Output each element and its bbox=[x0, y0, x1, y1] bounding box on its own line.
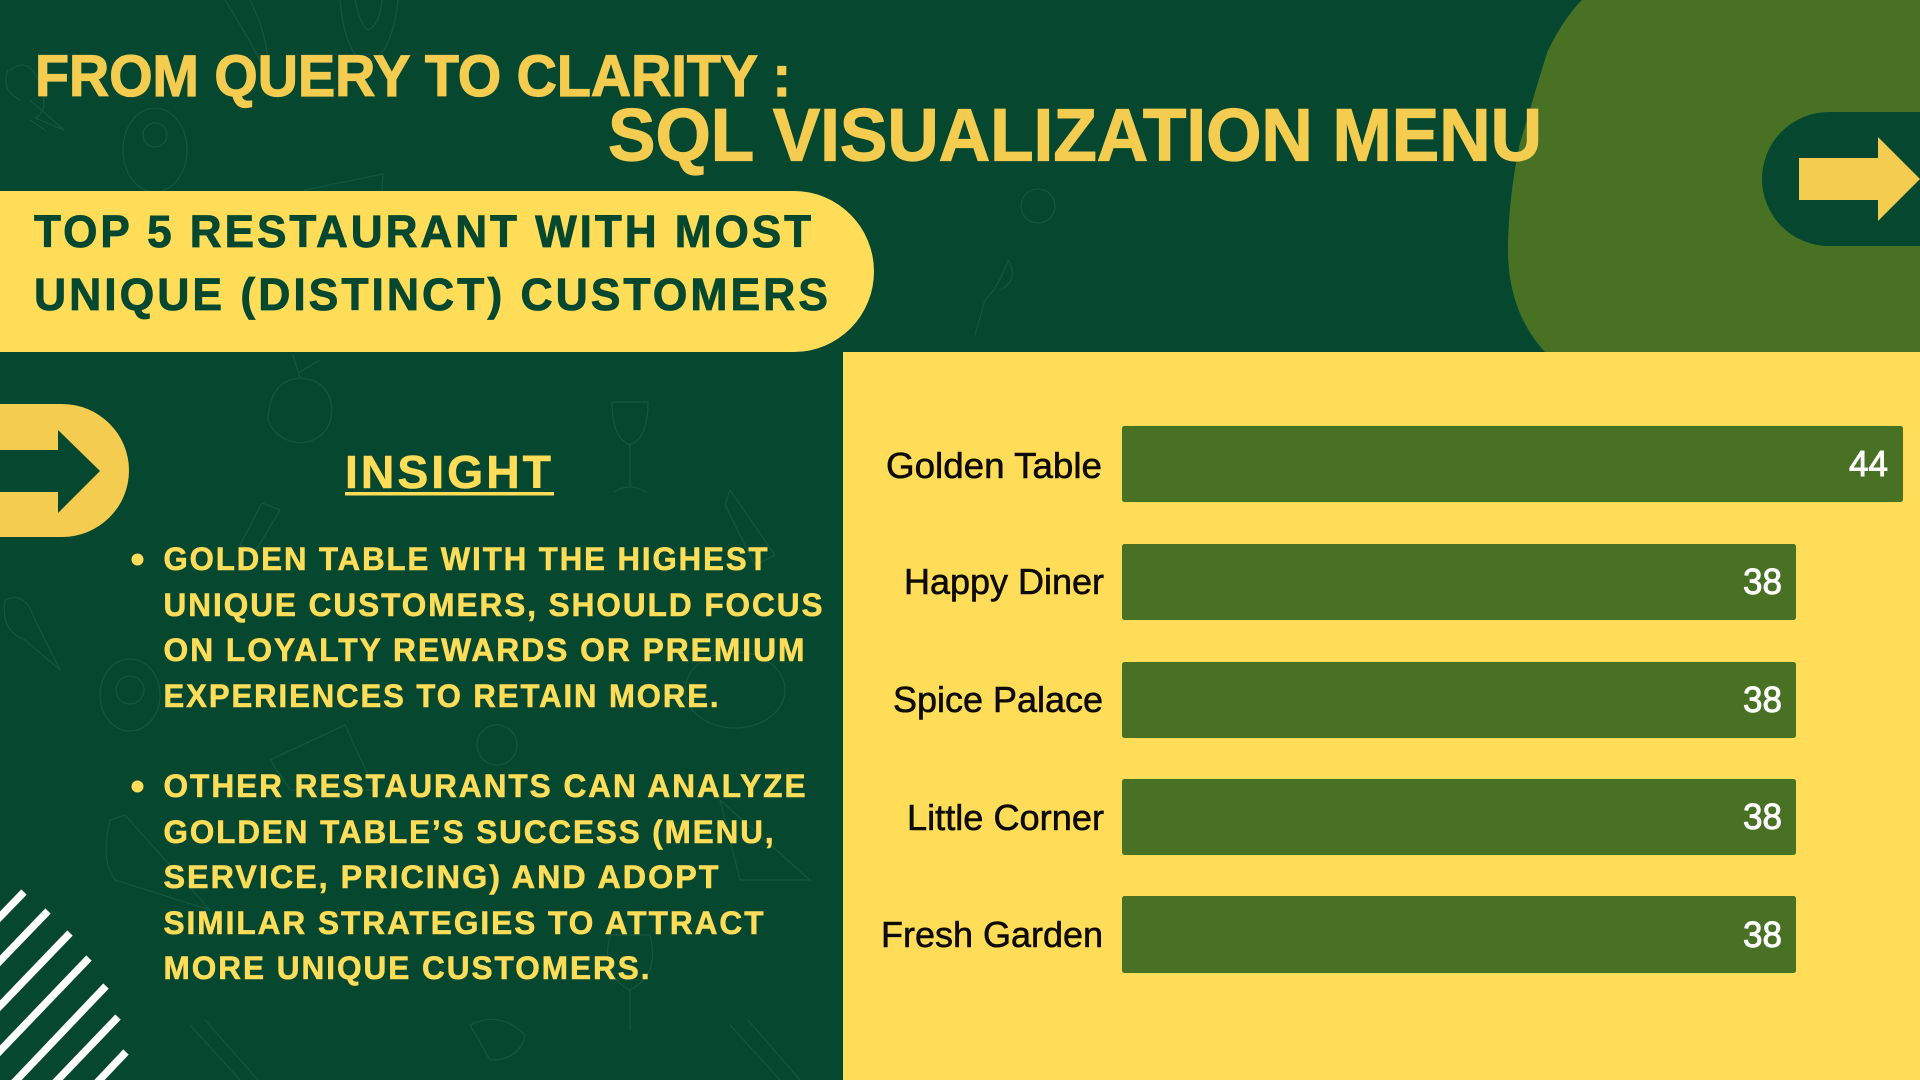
panel: bar chart bbox=[843, 352, 1920, 1080]
insight bullet 2 bbox=[132, 768, 808, 986]
insight heading: INSIGHT bbox=[345, 446, 554, 498]
title: FROM QUERY TO CLARITY : bbox=[35, 44, 791, 109]
food doodle pattern bbox=[4, 0, 1055, 1080]
insight bullet 2: MORE UNIQUE CUSTOMERS. bbox=[164, 950, 652, 986]
decorative white stripes bbox=[0, 892, 126, 1080]
heading pill: chart subject bbox=[0, 191, 874, 352]
insight bullet 2: SIMILAR STRATEGIES TO ATTRACT bbox=[164, 905, 766, 941]
bar: Fresh Garden 38: Fresh Garden bbox=[881, 914, 1103, 955]
bar: Little Corner 38: Little Corner bbox=[907, 797, 1104, 838]
heading pill: chart subject: TOP 5 RESTAURANT WITH MOST bbox=[34, 206, 814, 257]
heading pill: chart subject: UNIQUE (DISTINCT) CUSTOMERS bbox=[34, 269, 831, 320]
insight bullet 1: GOLDEN TABLE WITH THE HIGHEST bbox=[164, 541, 770, 577]
insight bullet 2: OTHER RESTAURANTS CAN ANALYZE bbox=[164, 768, 808, 804]
bar: Golden Table 44: 44 bbox=[1849, 443, 1888, 484]
bar: Golden Table 44 bbox=[886, 426, 1903, 502]
bar: Happy Diner 38: 38 bbox=[1743, 561, 1782, 602]
bar: Spice Palace 38 bbox=[893, 662, 1796, 738]
title: SQL VISUALIZATION MENU bbox=[608, 94, 1542, 176]
bar: Spice Palace 38: Spice Palace bbox=[893, 679, 1103, 720]
bar: Happy Diner 38: Happy Diner bbox=[904, 561, 1104, 602]
insight bullet 2: SERVICE, PRICING) AND ADOPT bbox=[164, 859, 721, 895]
bar: Spice Palace 38: 38 bbox=[1743, 679, 1782, 720]
bar: Happy Diner 38 bbox=[904, 544, 1796, 620]
bar: Fresh Garden 38 bbox=[881, 896, 1796, 973]
insight bullet 1 bbox=[132, 541, 824, 714]
bar: Fresh Garden 38: 38 bbox=[1743, 914, 1782, 955]
insight bullet 1: UNIQUE CUSTOMERS, SHOULD FOCUS bbox=[164, 587, 824, 623]
title bbox=[35, 44, 1542, 176]
icon: insight arrow badge bbox=[0, 404, 129, 537]
icon: top-right arrow badge bbox=[1762, 112, 1920, 246]
bar: Little Corner 38 bbox=[907, 779, 1796, 855]
insight bullet 2: GOLDEN TABLE’S SUCCESS (MENU, bbox=[164, 814, 776, 850]
bar: Golden Table 44: Golden Table bbox=[886, 445, 1102, 486]
insight bullet 1: EXPERIENCES TO RETAIN MORE. bbox=[164, 678, 720, 714]
insight bullet 1: ON LOYALTY REWARDS OR PREMIUM bbox=[164, 632, 806, 668]
decorative blob: top right bbox=[1508, 0, 1920, 352]
bar: Little Corner 38: 38 bbox=[1743, 796, 1782, 837]
